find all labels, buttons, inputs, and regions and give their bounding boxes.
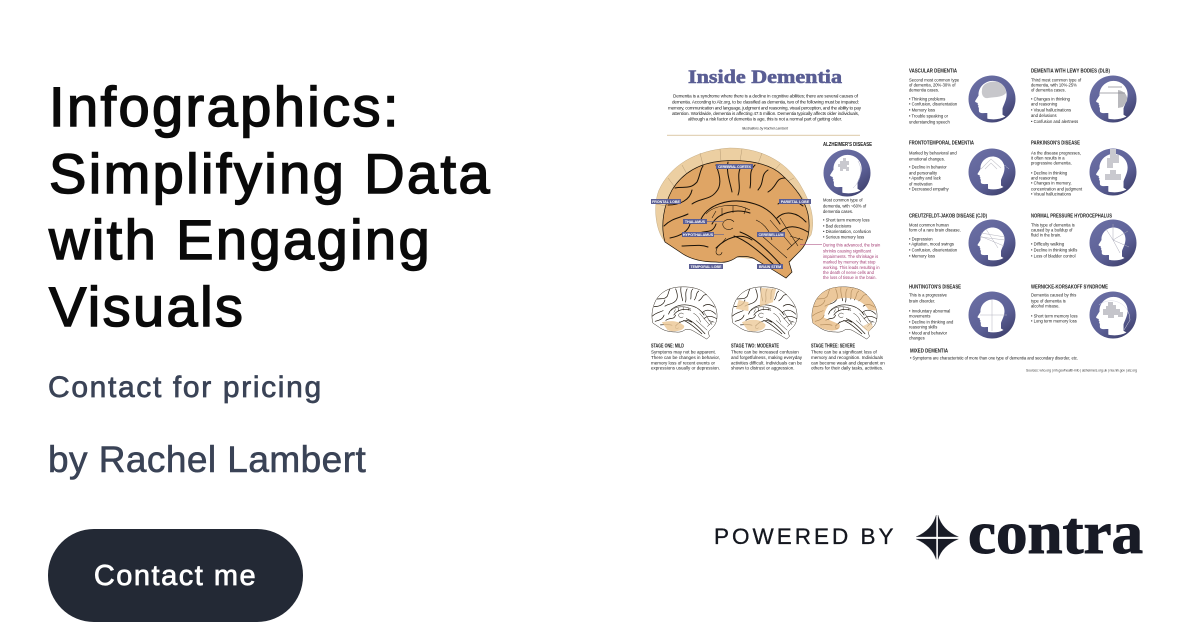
panel: frontotemporal dementia: • Decreased empathy [909, 186, 950, 192]
panel: creutzfeldt-jakob disease: form of a rare brain disease. [909, 228, 961, 232]
panel: huntington's disease: • Decline in thinking and [909, 320, 954, 324]
brain label: cerebral cortex: CEREBRAL CORTEX [718, 165, 752, 169]
panel: wernicke-korsakoff syndrome: • Short term memory loss [1031, 314, 1078, 318]
panel: vascular dementia: • Trouble speaking or [909, 114, 949, 118]
panel: dementia with lewy bodies: DEMENTIA WITH LEWY BODIES (DLB) [1031, 68, 1110, 74]
panel: vascular dementia: • Memory loss [909, 108, 935, 112]
logo star icon [916, 515, 958, 560]
panel: parkinson's disease: progressive dementia. [1031, 160, 1072, 166]
panel: creutzfeldt-jakob disease: • Agitation, mood swings [909, 242, 954, 246]
panel: dementia with lewy bodies: • Confusion and alertness [1031, 119, 1078, 124]
panel: dementia with lewy bodies: dementia, with 10%-25% [1031, 82, 1077, 88]
panel: huntington's disease: reasoning skills [909, 324, 937, 330]
panel: parkinson's disease [1031, 140, 1136, 196]
panel: normal pressure hydrocephalus: NORMAL PRESSURE HYDROCEPHALUS [1031, 214, 1113, 220]
panel: alzheimer's disease: • Serious memory loss [823, 234, 864, 240]
panel: huntington's disease: • Mood and behavior [909, 330, 948, 336]
stage caption: severe: can become weak and dependent on [811, 360, 885, 366]
panel: frontotemporal dementia: FRONTOTEMPORAL DEMENTIA [909, 140, 974, 146]
intro paragraph: dementia. According to Alz.org, to be classified as dementia, two of the following must be impaired: [672, 100, 859, 104]
panel: huntington's disease: brain disorder. [909, 298, 935, 304]
contra wordmark: contra [968, 500, 1143, 566]
callout: brain shrinks: shrinks causing significant [823, 248, 872, 254]
panel: normal pressure hydrocephalus: This type of dementia is [1031, 222, 1075, 228]
brain label: hypothalamus: HYPOTHALAMUS [683, 233, 714, 237]
title: Infographics: [49, 75, 401, 138]
panel: normal pressure hydrocephalus: • Decline in thinking skills [1031, 248, 1077, 252]
panel: wernicke-korsakoff syndrome: • Long term memory loss [1031, 318, 1077, 324]
icon: alzheimer head [824, 150, 870, 196]
contact button: Contact me [94, 560, 257, 592]
icon: creutzfeldt-jakob head [968, 220, 1016, 266]
panel: normal pressure hydrocephalus [1031, 214, 1136, 266]
stage caption: mild [651, 344, 720, 370]
intro paragraph: Dementia is a syndrome where there is a decline in cognitive abilities; there are several causes of [673, 94, 859, 98]
panel: frontotemporal dementia: Marked by behavioral and [909, 150, 957, 156]
stage caption: mild: expressions usually or depression. [651, 366, 720, 370]
title [48, 75, 492, 338]
panel: mixed dementia: • Symptoms are characteristic of more than one type of dementia and secondary disorder, etc. [910, 356, 1078, 360]
author text: by Rachel Lambert [48, 439, 366, 480]
panel: huntington's disease: This is a progressive [909, 292, 948, 298]
icon: huntington's head [968, 292, 1016, 338]
stage caption: mild: Symptoms may not be apparent. [651, 350, 716, 354]
intro paragraph: attention. Worldwide, dementia is affecting 47.5 million. Dementia typically affects older individuals, [672, 111, 859, 116]
panel: parkinson's disease: PARKINSON'S DISEASE [1031, 140, 1081, 146]
intro paragraph [668, 94, 862, 122]
panel: creutzfeldt-jakob disease: Most common human [909, 222, 950, 228]
icon: lewy bodies head [1090, 76, 1136, 122]
stage caption: moderate: There can be increased confusion [731, 350, 799, 354]
panel: frontotemporal dementia: emotional changes. [909, 156, 945, 162]
panel: wernicke-korsakoff syndrome: alcohol misuse. [1031, 304, 1060, 308]
pricing text: Contact for pricing [48, 371, 323, 404]
panel: alzheimer's disease: ALZHEIMER'S DISEASE [823, 142, 873, 148]
panel: huntington's disease: HUNTINGTON'S DISEASE [909, 284, 962, 290]
panel: normal pressure hydrocephalus: fluid in the brain. [1031, 232, 1061, 238]
panel: vascular dementia: • Confusion, disorientation [909, 102, 958, 106]
icon: frontotemporal head [968, 148, 1016, 196]
panel: dementia with lewy bodies: and reasoning [1031, 102, 1058, 106]
panel: dementia with lewy bodies: of dementia cases. [1031, 88, 1066, 92]
stage brain: moderate [732, 287, 797, 339]
panel: frontotemporal dementia: and personality [909, 170, 938, 176]
panel: frontotemporal dementia [909, 140, 1016, 196]
main brain illustration [651, 148, 813, 278]
panel: parkinson's disease: • Changes in memory, [1031, 180, 1072, 186]
panel: vascular dementia: • Thinking problems [909, 96, 945, 102]
panel: dementia with lewy bodies: • Visual hallucinations [1031, 108, 1071, 112]
stage caption: moderate: and forgetfulness, making everyday [731, 355, 803, 360]
panel: alzheimer's disease: Most common type of [823, 198, 863, 202]
illustration credit: Illustrations by Rachel Lambert [742, 126, 789, 130]
panel: normal pressure hydrocephalus: • Loss of bladder control [1031, 254, 1076, 258]
callout: brain shrinks: marked by memory that stop [823, 260, 876, 264]
panel: parkinson's disease: As the disease progresses, [1031, 150, 1081, 156]
panel: parkinson's disease: it often results in a [1031, 156, 1065, 160]
stage brain: severe [812, 287, 877, 339]
panel: vascular dementia: understanding speech [909, 120, 950, 124]
panel: mixed dementia [910, 348, 1078, 360]
icon: normal pressure head [1090, 220, 1136, 266]
panel: alzheimer's disease: • Disorientation, confusion [823, 229, 872, 234]
panel: wernicke-korsakoff syndrome [1031, 284, 1136, 338]
panel: vascular dementia: of dementia, 20%-30% of [909, 82, 956, 88]
contact button [48, 529, 303, 622]
brain label: temporal lobe: TEMPORAL LOBE [690, 265, 722, 269]
panel: creutzfeldt-jakob disease: • Memory loss [909, 254, 935, 258]
brain label: thalamus: THALAMUS [685, 220, 706, 224]
panel: wernicke-korsakoff syndrome: type of dementia is [1031, 298, 1066, 304]
brain label: hypothalamus [682, 232, 724, 237]
title: with Engaging [49, 208, 432, 271]
stage caption: moderate [731, 344, 803, 370]
panel: alzheimer's disease: dementia cases. [823, 209, 853, 214]
panel: wernicke-korsakoff syndrome: WERNICKE-KORSAKOFF SYNDROME [1031, 284, 1109, 290]
sources line: Sources: who.org | nih.gov/health-info | alzheimers.org.uk | nia.nih.gov | alz.org [1026, 368, 1137, 372]
brain label: brain stem: BRAIN STEM [759, 265, 781, 269]
panel: vascular dementia: dementia cases. [909, 88, 939, 92]
title: Visuals [49, 275, 245, 338]
panel: mixed dementia: MIXED DEMENTIA [910, 348, 948, 354]
callout: brain shrinks: working. This leads resulting in [823, 265, 880, 270]
brain label: cerebellum: CEREBELLUM [759, 233, 783, 237]
panel: dementia with lewy bodies [1031, 68, 1136, 124]
panel: vascular dementia: VASCULAR DEMENTIA [909, 68, 957, 74]
panel: normal pressure hydrocephalus: • Difficulty walking [1031, 242, 1065, 246]
icon: wernicke-korsakoff head [1090, 292, 1136, 338]
panel: wernicke-korsakoff syndrome: Dementia caused by this [1031, 292, 1076, 298]
panel: parkinson's disease: and reasoning [1031, 176, 1058, 180]
panel: huntington's disease [909, 284, 1016, 340]
brain label: parietal lobe: PARIETAL LOBE [781, 200, 810, 204]
panel: huntington's disease: • Involuntary abnormal [909, 308, 950, 314]
panel: dementia with lewy bodies: and delusions [1031, 113, 1057, 118]
panel: huntington's disease: changes [909, 336, 925, 340]
panel: huntington's disease: movements [909, 314, 930, 318]
stage caption: severe [811, 344, 885, 370]
callout: brain shrinks: the loss of tissue in the brain. [823, 275, 877, 280]
panel: frontotemporal dementia: • Decline in behavior [909, 164, 947, 170]
panel: vascular dementia [909, 68, 1016, 124]
panel: parkinson's disease: • Decline in thinking [1031, 170, 1068, 176]
panel: frontotemporal dementia: • Apathy and lack [909, 176, 942, 180]
panel: normal pressure hydrocephalus: caused by a buildup of [1031, 228, 1073, 232]
panel: alzheimer's disease: dementia, with ~60% of [823, 204, 867, 208]
icon: vascular head [968, 76, 1016, 122]
panel: creutzfeldt-jakob disease: CREUTZFELDT-JAKOB DISEASE (CJD) [909, 214, 987, 220]
panel: parkinson's disease: • Visual hallucinations [1031, 192, 1071, 196]
panel: creutzfeldt-jakob disease: • Depression [909, 236, 933, 242]
title: Simplifying Data [49, 142, 492, 205]
stage caption: moderate: activities difficult. Individuals can be [731, 360, 802, 366]
callout: brain shrinks: the death of nerve cells and [823, 270, 875, 275]
panel: alzheimer's disease: • Short term memory loss [823, 218, 870, 222]
infographic title: Inside Dementia [688, 67, 843, 88]
stage caption: mild: memory loss of recent events or [651, 360, 716, 366]
callout: brain shrinks: impairments. The shrinkage is [823, 254, 878, 259]
panel: parkinson's disease: concentration and judgment [1031, 186, 1083, 192]
intro paragraph: memory, communication and language, judgment and reasoning, visual perception, and the ability to pay [668, 106, 862, 110]
stage caption: severe: There can be a significant loss of [811, 350, 878, 354]
stage caption: moderate: shown to distrust or aggression. [731, 366, 795, 370]
intro paragraph: although a risk factor of dementia is age, this is not a normal part of getting older. [688, 116, 842, 122]
panel: creutzfeldt-jakob disease [909, 214, 1016, 266]
panel: dementia with lewy bodies: • Changes in thinking [1031, 96, 1071, 102]
panel: alzheimer's disease [800, 142, 881, 280]
panel: dementia with lewy bodies: Third most common type of [1031, 78, 1082, 82]
stage brain: mild [652, 287, 717, 339]
stage caption: mild: There can be changes in behavior, [651, 355, 720, 360]
stage caption: severe: STAGE THREE: SEVERE [811, 344, 855, 350]
stage caption: severe: others for their daily tasks, activities. [811, 366, 883, 370]
stage caption: severe: memory and recognition. Individuals [811, 355, 884, 360]
callout: brain shrinks [800, 242, 881, 280]
brain label: thalamus [683, 219, 723, 224]
panel: vascular dementia: Second most common type [909, 78, 960, 82]
stage caption: moderate: STAGE TWO: MODERATE [731, 344, 780, 350]
powered by label: POWERED BY [714, 524, 897, 549]
icon: parkinson's head [1090, 148, 1136, 196]
stage caption: mild: STAGE ONE: MILD [651, 344, 684, 350]
panel: frontotemporal dementia: of motivation [909, 182, 933, 186]
panel: creutzfeldt-jakob disease: • Confusion, disorientation [909, 248, 958, 252]
panel: alzheimer's disease: • Bad decisions [823, 224, 851, 228]
brain label: brain stem [757, 264, 783, 269]
callout: brain shrinks: During this advanced, the brain [823, 242, 881, 248]
brain label: frontal lobe: FRONTAL LOBE [652, 200, 681, 204]
